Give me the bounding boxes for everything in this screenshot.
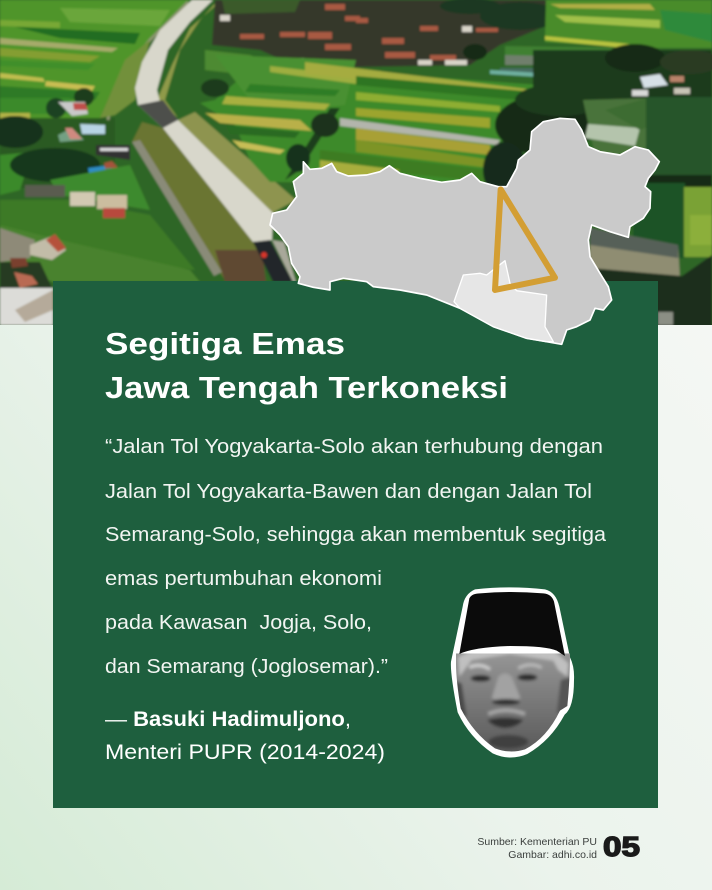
building <box>590 244 682 278</box>
tree mass <box>494 100 589 154</box>
quote text: dan Semarang (Joglosemar).” <box>105 656 388 678</box>
source credits <box>477 836 597 861</box>
quote text: pada Kawasan Jogja, Solo, <box>105 612 372 634</box>
attribution: — Basuki Hadimuljono , <box>105 708 351 731</box>
green panel <box>53 281 658 808</box>
houses bottom-left <box>0 228 35 262</box>
face <box>456 654 570 752</box>
quote text: “Jalan Tol Yogyakarta-Solo akan terhubung dengan <box>105 436 603 458</box>
dark tree band right <box>533 50 712 100</box>
map: Yogyakarta region <box>454 261 553 342</box>
central rice fields <box>200 68 540 182</box>
quote text: Semarang-Solo, sehingga akan membentuk segitiga <box>105 524 607 546</box>
attribution <box>105 708 385 764</box>
black peci hat <box>459 592 565 656</box>
map: Jawa Tengah region <box>270 118 659 344</box>
quote text: emas pertumbuhan ekonomi <box>105 568 382 590</box>
embankments <box>132 122 265 280</box>
centre right block with pool <box>504 54 535 66</box>
right side crops <box>583 98 650 155</box>
map of Central Java <box>270 118 659 344</box>
page number: 05 <box>603 831 640 862</box>
title <box>105 327 508 405</box>
lower right dark <box>598 254 712 325</box>
attribution: Menteri PUPR (2014-2024) <box>105 741 385 764</box>
village <box>212 0 560 68</box>
golden triangle <box>495 189 555 290</box>
left trees and houses <box>0 118 115 188</box>
quote text <box>105 436 607 678</box>
mid-left fields <box>50 165 150 210</box>
aerial photo of toll road and rice fields <box>0 0 712 330</box>
centre dark trees by village <box>480 2 546 30</box>
top-right fields <box>545 0 712 48</box>
title: Jawa Tengah Terkoneksi <box>105 371 508 405</box>
title: Segitiga Emas <box>105 327 345 361</box>
road <box>135 0 273 242</box>
upper-left fields <box>0 0 190 125</box>
portrait: Basuki Hadimuljono <box>450 587 577 758</box>
quote text: Jalan Tol Yogyakarta-Bawen dan dengan Jalan Tol <box>105 481 592 503</box>
source credits: Sumber: Kementerian PU <box>477 836 597 848</box>
source credits: Gambar: adhi.co.id <box>508 849 597 861</box>
portrait white outline <box>451 587 574 758</box>
